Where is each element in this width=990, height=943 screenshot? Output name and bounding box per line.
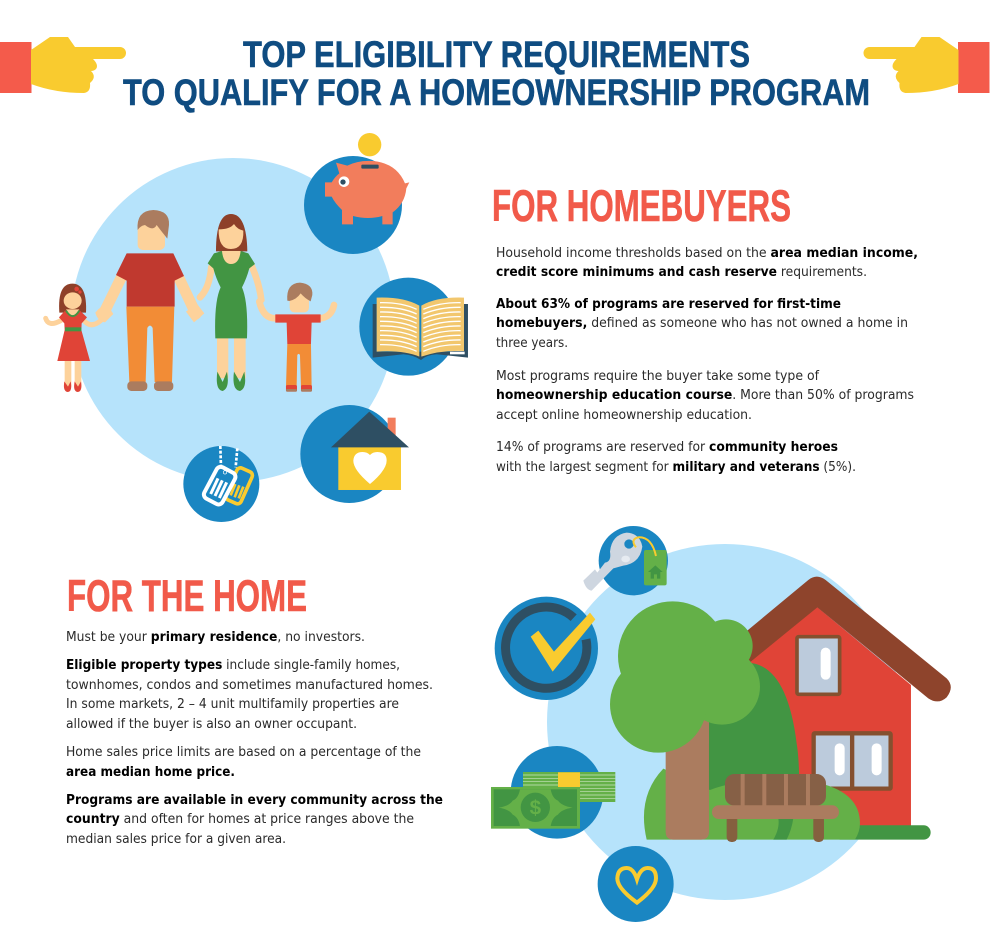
bench xyxy=(712,774,839,842)
text block: home details: allowed if the buyer is also an owner occupant. xyxy=(66,717,357,732)
text block: homebuyers details: accept online homeownership education. xyxy=(496,408,752,423)
text block: homebuyers details: Most programs require the buyer take some type of xyxy=(496,369,819,384)
icon: cash stack: $ xyxy=(530,797,542,820)
icon: pointing hand left xyxy=(0,37,126,93)
heading: for homebuyers: FOR HOMEBUYERS xyxy=(492,182,791,231)
icon: piggy bank xyxy=(304,133,409,254)
text block: home details: median sales price for a given area. xyxy=(66,832,286,847)
icon: cash stack xyxy=(491,746,615,839)
house roof xyxy=(740,577,951,701)
background circle xyxy=(547,544,903,900)
text block: home details: Home sales price limits are based on a percentage of the xyxy=(66,745,421,760)
text block: homebuyers details: homebuyers, defined as someone who has not owned a home in xyxy=(496,316,908,331)
panel: home illustration xyxy=(491,526,951,922)
figure: woman xyxy=(200,214,261,391)
house walls xyxy=(750,607,911,833)
icon: heart badge xyxy=(598,846,674,922)
panel: homebuyers illustration xyxy=(46,133,468,522)
lower window xyxy=(814,733,891,789)
text block: home details: Programs are available in every community across the xyxy=(66,793,443,808)
illustration: house, tree and bench xyxy=(610,577,951,842)
icon: house with heart xyxy=(300,405,409,503)
dark bush xyxy=(700,663,799,803)
background circle xyxy=(71,158,395,482)
icon: key with tag xyxy=(583,526,668,595)
title xyxy=(123,33,870,113)
upper window xyxy=(797,637,840,694)
figure: man xyxy=(95,210,204,391)
text block: homebuyers details: credit score minimums and cash reserve requirements. xyxy=(496,265,867,280)
icon: dog tags xyxy=(183,446,259,522)
text block: homebuyers details: 14% of programs are reserved for community heroes xyxy=(496,440,838,455)
icon: pointing hand right xyxy=(864,37,990,93)
heading: for the home: FOR THE HOME xyxy=(67,572,307,621)
text block: homebuyers details: with the largest segment for military and veterans (5%). xyxy=(496,460,856,475)
text block: homebuyers details: three years. xyxy=(496,336,568,351)
text block: home details: In some markets, 2 – 4 unit multifamily properties are xyxy=(66,697,399,712)
text block: homebuyers details: homeownership education course. More than 50% of programs xyxy=(496,388,914,403)
path strip xyxy=(833,825,931,840)
text block: home details: area median home price. xyxy=(66,765,235,780)
text block: home details: Must be your primary residence, no investors. xyxy=(66,630,365,645)
family figures xyxy=(46,210,334,392)
text block: homebuyers details: Household income thresholds based on the area median income, xyxy=(496,246,918,261)
tree crown xyxy=(610,601,760,753)
tree trunk xyxy=(666,717,709,840)
icon: check mark badge xyxy=(495,597,598,700)
text block: home details: country and often for homes at price ranges above the xyxy=(66,812,414,827)
text block: home details xyxy=(66,630,443,847)
figure: boy xyxy=(259,283,334,392)
title: TOP ELIGIBILITY REQUIREMENTS xyxy=(243,33,750,75)
text block: home details: Eligible property types include single-family homes, xyxy=(66,658,400,673)
text block: homebuyers details: About 63% of programs are reserved for first-time xyxy=(496,297,841,312)
front bushes xyxy=(644,769,860,840)
text block: homebuyers details xyxy=(496,246,918,475)
text block: home details: townhomes, condos and sometimes manufactured homes. xyxy=(66,678,433,693)
icon: open book xyxy=(359,278,468,376)
figure: girl xyxy=(46,284,101,392)
